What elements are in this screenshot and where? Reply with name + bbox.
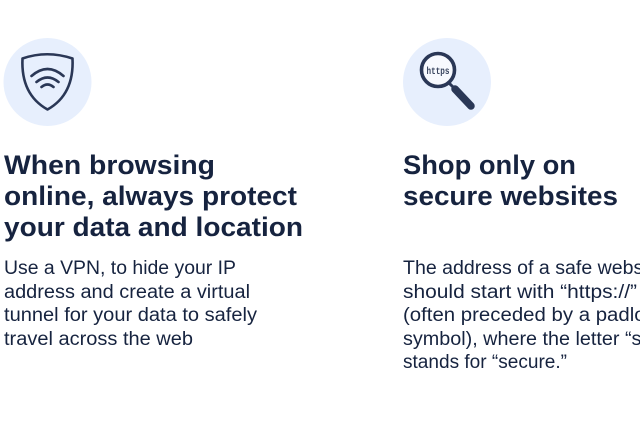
heading: VPN tip: When browsing	[4, 150, 215, 180]
text block: secure shopping advice	[403, 258, 640, 373]
text block: VPN advice: travel across the web	[4, 329, 193, 350]
heading: secure shopping tip	[403, 150, 618, 211]
heading: secure shopping tip: secure websites	[403, 181, 618, 211]
text block: secure shopping advice: stands for “secure.”	[403, 352, 567, 373]
icon: magnifying glass over https: https	[426, 66, 450, 78]
heading: secure shopping tip: Shop only on	[403, 150, 576, 180]
heading: VPN tip: online, always protect	[4, 181, 297, 211]
text block: VPN advice: address and create a virtual	[4, 282, 250, 303]
text block: VPN advice	[4, 258, 258, 350]
panel: secure shopping tip	[403, 38, 640, 373]
icon: magnifying glass over https	[403, 38, 491, 126]
panel: VPN tip	[4, 38, 303, 350]
text block: VPN advice: Use a VPN, to hide your IP	[4, 258, 236, 279]
heading: VPN tip	[4, 150, 303, 242]
text block: VPN advice: tunnel for your data to safely	[4, 305, 258, 326]
icon: shield with wifi signal	[4, 38, 92, 126]
text block: secure shopping advice: symbol), where the letter “s”	[403, 329, 640, 350]
heading: VPN tip: your data and location	[4, 212, 303, 242]
text block: secure shopping advice: should start with “https://”	[403, 282, 637, 303]
